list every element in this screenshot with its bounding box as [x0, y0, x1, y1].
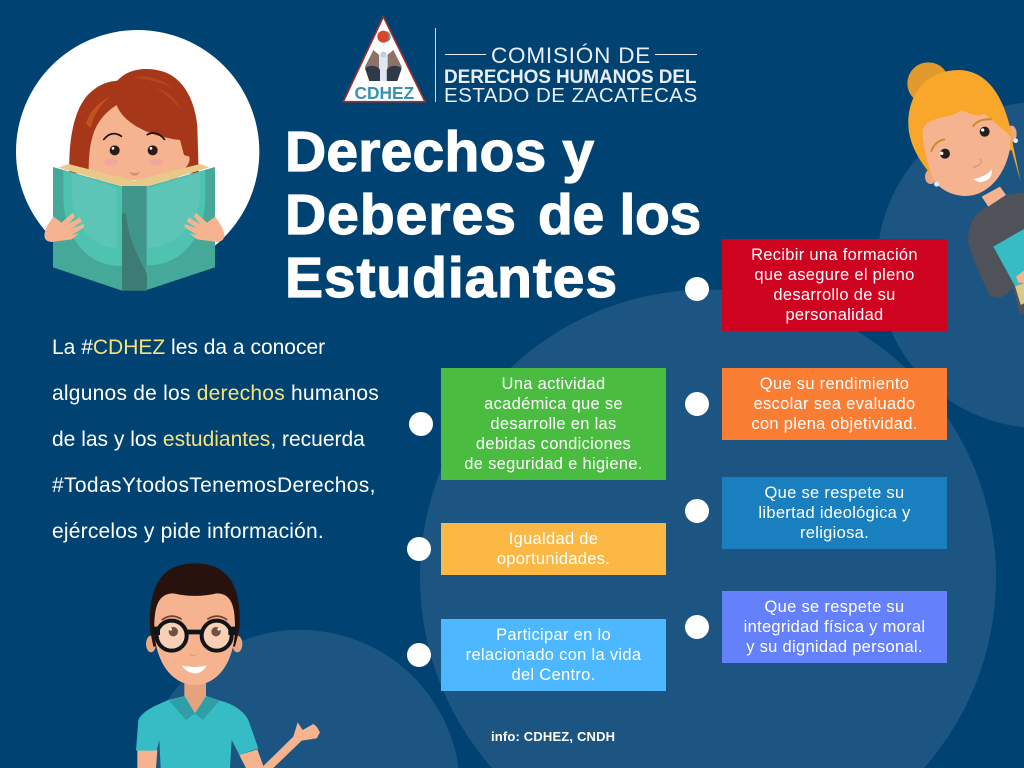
box: evaluation: Que su rendimiento: [760, 375, 909, 393]
box: evaluation: [722, 368, 947, 440]
dot: [407, 537, 431, 561]
box: integrity: Que se respete su: [765, 598, 904, 616]
box: participation: del Centro.: [511, 666, 596, 684]
title: Derechos y: [285, 120, 594, 184]
box: formation: personalidad: [785, 306, 884, 324]
logo text: COMISIÓN DE: [491, 43, 651, 68]
box: integrity: integridad física y moral: [744, 618, 925, 636]
box: ideological freedom: religiosa.: [800, 524, 869, 542]
logo divider: [435, 28, 436, 102]
box: integrity: [722, 591, 947, 663]
intro text: ejércelos y pide información.: [52, 520, 324, 543]
box: activity: [441, 368, 666, 480]
logo triangle: CDHEZ: [354, 83, 415, 103]
box: formation: [722, 239, 947, 331]
title: de los: [538, 183, 701, 247]
source note: info: CDHEZ, CNDH: [491, 729, 615, 744]
box: integrity: y su dignidad personal.: [746, 638, 923, 656]
box: formation: que asegure el pleno: [754, 266, 915, 284]
intro text: La #CDHEZ les da a conocer: [52, 336, 325, 359]
box: activity: desarrolle en las: [490, 415, 617, 433]
box: ideological freedom: Que se respete su: [765, 484, 904, 502]
logo text: DERECHOS HUMANOS DEL: [444, 67, 696, 88]
logo triangle: [342, 14, 426, 103]
title: Estudiantes: [285, 246, 618, 310]
logo text: [444, 43, 698, 107]
illustration: woman with book: [907, 62, 1024, 315]
intro text: de las y los estudiantes, recuerda: [52, 428, 365, 451]
dot: [407, 643, 431, 667]
box: activity: de seguridad e higiene.: [464, 455, 643, 473]
box: activity: académica que se: [484, 395, 623, 413]
dot: [685, 392, 709, 416]
box: ideological freedom: libertad ideológica y: [758, 504, 911, 522]
box: evaluation: escolar sea evaluado: [754, 395, 915, 413]
intro text: algunos de los derechos humanos: [52, 382, 379, 405]
logo: CDHEZ: [342, 14, 698, 107]
dot: [685, 499, 709, 523]
dot: [685, 277, 709, 301]
title: [285, 120, 701, 310]
box: equal opportunities: Igualdad de: [509, 530, 598, 548]
box: participation: [441, 619, 666, 691]
intro text: #TodasYtodosTenemosDerechos,: [52, 474, 376, 497]
box: activity: Una actividad: [502, 375, 605, 393]
illustration: man with glasses: [136, 563, 320, 768]
box: ideological freedom: [722, 477, 947, 549]
box: equal opportunities: oportunidades.: [497, 550, 610, 568]
title: Deberes: [285, 183, 517, 247]
dot: [685, 615, 709, 639]
illustration: girl reading a book: [16, 30, 260, 291]
box: formation: Recibir una formación: [751, 246, 918, 264]
box: participation: relacionado con la vida: [466, 646, 641, 664]
box: evaluation: con plena objetividad.: [751, 415, 918, 433]
box: participation: Participar en lo: [496, 626, 611, 644]
box: formation: desarrollo de su: [773, 286, 896, 304]
intro text: [52, 336, 379, 543]
dot: [409, 412, 433, 436]
box: equal opportunities: [441, 523, 666, 575]
logo text: ESTADO DE ZACATECAS: [444, 84, 698, 107]
box: activity: debidas condiciones: [476, 435, 631, 453]
